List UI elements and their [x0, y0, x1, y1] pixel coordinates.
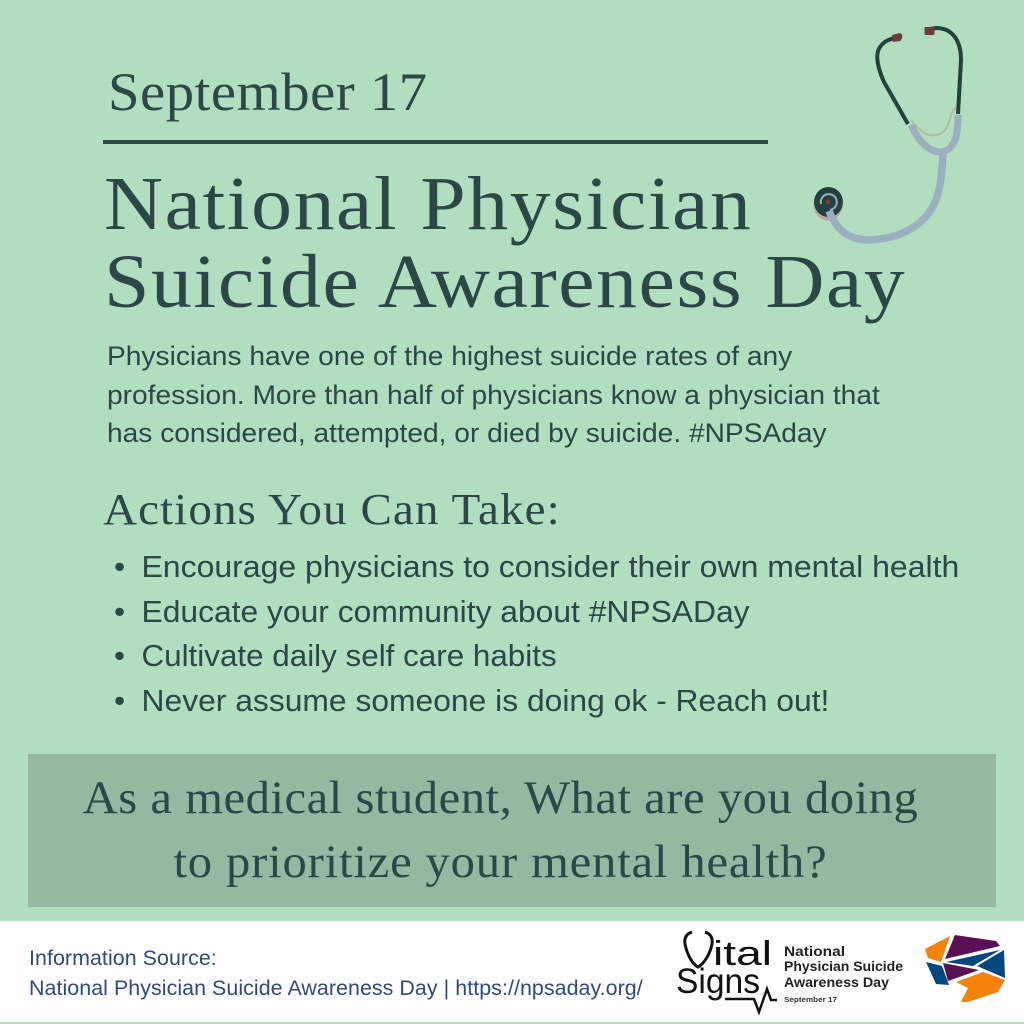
intro paragraph: has considered, attempted, or died by suicide. #NPSAday: [107, 418, 827, 448]
action item 3: Cultivate daily self care habits: [141, 639, 557, 673]
date heading: September 17: [108, 62, 428, 122]
intro paragraph: [107, 341, 880, 448]
action list: [114, 550, 959, 718]
action item 4: Never assume someone is doing ok - Reach out!: [142, 684, 829, 718]
callout text: [83, 772, 918, 888]
intro paragraph: profession. More than half of physicians know a physician that: [107, 380, 880, 410]
logo: brain: [925, 935, 1005, 1002]
logo: Vital Signs: Signs: [676, 962, 760, 1001]
source text: National Physician Suicide Awareness Day | https://npsaday.org/: [29, 976, 643, 1000]
logo: Vital Signs: ital: [713, 935, 772, 973]
source text: Information Source:: [29, 946, 217, 970]
action item 3: •: [114, 639, 125, 673]
source text: [29, 946, 643, 1000]
callout text: to prioritize your mental health?: [173, 836, 828, 888]
logo: Vital Signs: Awareness Day: [784, 974, 889, 990]
logo: Vital Signs: National: [784, 943, 845, 959]
action item 1: Encourage physicians to consider their own mental health: [141, 550, 959, 584]
action item 4: •: [114, 684, 125, 718]
intro paragraph: Physicians have one of the highest suicide rates of any: [107, 341, 792, 371]
action item 1: •: [114, 550, 125, 584]
logo: Vital Signs: [676, 930, 903, 1016]
heading divider: [103, 140, 768, 144]
main title: Suicide Awareness Day: [104, 240, 906, 324]
callout: question banner: [28, 754, 996, 907]
callout text: As a medical student, What are you doing: [83, 772, 918, 824]
logo: Vital Signs: Physician Suicide: [784, 958, 903, 974]
main title: [104, 162, 906, 324]
icon: stethoscope: [814, 26, 963, 244]
footer band: [0, 921, 1024, 1022]
actions heading: Actions You Can Take:: [103, 485, 561, 534]
action item 2: Educate your community about #NPSADay: [142, 594, 750, 628]
action item 2: •: [114, 594, 125, 628]
main title: National Physician: [104, 162, 752, 246]
logo: Vital Signs: September 17: [784, 995, 837, 1004]
